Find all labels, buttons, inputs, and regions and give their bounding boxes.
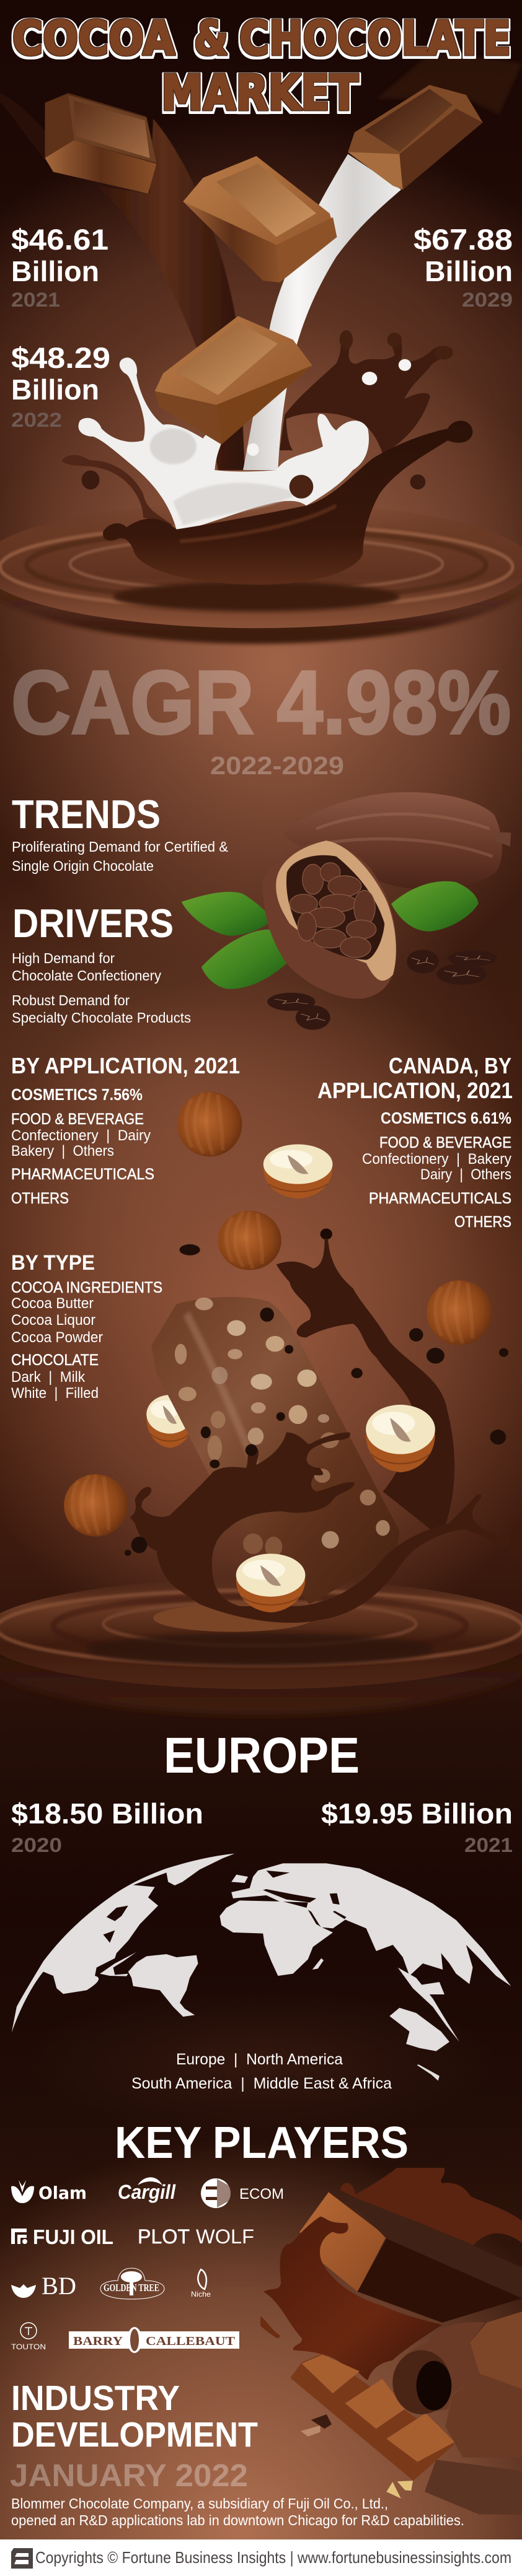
chocolate crown — [61, 330, 473, 585]
chocolate block 3 — [348, 85, 483, 190]
panel: drivers: Chocolate Confectionery — [12, 967, 161, 984]
panel: europe: EUROPE — [164, 1727, 360, 1784]
milk splash — [78, 357, 411, 530]
ribbon of chocolate — [276, 1239, 454, 1531]
logo: barry callebaut: BARRY — [73, 2334, 123, 2348]
region list — [131, 2051, 392, 2092]
logo: olam — [11, 2180, 87, 2203]
panel: canada by application 2021: PHARMACEUTICALS — [369, 1190, 511, 1207]
chocolate block 1 — [45, 93, 157, 194]
title — [12, 11, 511, 121]
panel: industry development: DEVELOPMENT — [11, 2415, 258, 2455]
panel: drivers — [12, 901, 191, 1026]
panel: europe: $18.50 Billion — [11, 1797, 203, 1830]
panel: drivers: Specialty Chocolate Products — [12, 1010, 191, 1026]
panel: by type: Cocoa Powder — [11, 1329, 103, 1346]
panel: industry development: INDUSTRY — [11, 2378, 180, 2418]
logo: bd — [11, 2272, 76, 2300]
chocolate stream — [0, 51, 522, 470]
logo: golden tree: GOLDEN TREE — [104, 2282, 159, 2294]
panel: by type: Cocoa Liquor — [11, 1312, 95, 1329]
chocolate block 2 — [183, 156, 337, 282]
title: & — [194, 11, 228, 66]
new zealand — [417, 2064, 440, 2080]
panel: europe: 2020 — [11, 1834, 62, 1856]
logo: touton — [11, 2323, 46, 2351]
panel: by type: Cocoa Butter — [11, 1295, 94, 1312]
panel: industry development — [10, 2378, 464, 2528]
panel: by application 2021: Bakery | Others — [11, 1143, 114, 1159]
region list: South America | Middle East & Africa — [131, 2075, 392, 2092]
panel: trends — [12, 792, 228, 874]
panel: industry development: opened an R&D applications lab in downtown Chicago for R&D capabilities. — [11, 2512, 464, 2528]
eurasia — [231, 1863, 511, 1986]
whole pod — [283, 792, 511, 889]
panel: by type: CHOCOLATE — [11, 1351, 99, 1369]
ripple pool — [0, 494, 522, 644]
chocolate curl — [392, 2322, 485, 2414]
panel: by type: White | Filled — [11, 1385, 99, 1402]
logo: ecom — [201, 2178, 284, 2208]
halved hazelnut bottom — [236, 1553, 305, 1612]
icon: fortune business insights — [11, 2548, 33, 2569]
whole hazelnut right — [427, 1280, 492, 1345]
stat: 2022 market size: 2022 — [11, 409, 62, 431]
panel: europe: 2021 — [464, 1834, 513, 1856]
halved hazelnut — [263, 1144, 332, 1198]
region list: Europe | North America — [176, 2051, 343, 2068]
southeast asia islands — [398, 1968, 459, 2042]
logo: plot wolf — [138, 2225, 254, 2248]
logo: touton: TOUTON — [11, 2342, 46, 2351]
stat: 2021 market size: 2021 — [11, 289, 60, 311]
logo: cargill: Cargill — [118, 2181, 176, 2203]
title: COCOA — [12, 11, 175, 66]
halved hazelnut right — [366, 1405, 435, 1472]
panel: by application 2021: Confectionery | Dairy — [11, 1127, 151, 1144]
front swirl — [263, 2217, 442, 2380]
illustration: chocolate stack — [260, 2168, 522, 2515]
panel: drivers: High Demand for — [12, 950, 115, 966]
back chocolate splash — [280, 331, 453, 454]
panel: drivers: DRIVERS — [12, 901, 174, 946]
ripple pool — [0, 1569, 522, 1715]
milk stream — [243, 154, 401, 470]
stat: 2021 market size: $46.61 — [11, 223, 108, 256]
logo: niche — [191, 2269, 211, 2299]
back halved hazelnut — [146, 1395, 193, 1448]
logo: bd: BD — [42, 2272, 76, 2300]
panel: by application 2021 — [11, 1053, 240, 1207]
panel: by type — [11, 1251, 162, 1402]
footer — [0, 2539, 522, 2576]
chocolate bar face — [299, 2192, 386, 2292]
floating chocolate drops — [125, 1244, 508, 1556]
africa — [219, 1900, 333, 1976]
panel: industry development: JANUARY 2022 — [10, 2458, 248, 2493]
chocolate bar — [151, 1297, 399, 1604]
stat: 2029 market size: Billion — [425, 255, 513, 287]
hazelnut — [177, 1092, 242, 1156]
logo: golden tree — [100, 2268, 164, 2299]
whole hazelnut left — [64, 1474, 128, 1537]
panel: canada by application 2021 — [317, 1053, 513, 1231]
loose cocoa beans — [267, 950, 497, 1030]
panel: by application 2021: PHARMACEUTICALS — [11, 1166, 154, 1183]
logo: olam: Olam — [38, 2183, 87, 2203]
north america and greenland — [12, 1854, 235, 2033]
panel: drivers: Robust Demand for — [12, 992, 130, 1008]
panel: industry development: Blommer Chocolate Company, a subsidiary of Fuji Oil Co., Ltd., — [11, 2495, 388, 2512]
leaves — [182, 881, 479, 989]
logo: barry callebaut — [69, 2327, 239, 2353]
chocolate tablet — [290, 2354, 454, 2481]
illustration: cocoa pod — [177, 792, 511, 1270]
logo: niche: Niche — [191, 2290, 211, 2299]
stat: 2022 market size: $48.29 — [11, 341, 110, 374]
madagascar — [312, 1958, 324, 1970]
panel: trends: Proliferating Demand for Certified & — [12, 839, 228, 855]
back splash — [340, 2168, 522, 2245]
world map — [12, 1854, 511, 2080]
panel: trends: TRENDS — [12, 792, 161, 837]
front chocolate splash — [130, 1433, 511, 1623]
logo: plot wolf: WOLF — [196, 2225, 254, 2248]
title: MARKET — [161, 66, 358, 121]
stat: 2029 market size: $67.88 — [414, 223, 513, 256]
inland seas — [103, 1871, 346, 1943]
logo: barry callebaut: CALLEBAUT — [146, 2334, 236, 2348]
logo: ecom: ECOM — [239, 2186, 284, 2203]
uk — [231, 1875, 248, 1883]
logo: fuji oil: FUJI OIL — [33, 2225, 113, 2248]
panel: canada by application 2021: Dairy | Others — [420, 1166, 511, 1183]
panel: by type: BY TYPE — [11, 1251, 95, 1275]
panel: by type: Dark | Milk — [11, 1369, 86, 1386]
opened pod — [263, 840, 396, 999]
CAGR callout: 2022-2029 — [210, 751, 344, 780]
panel: by application 2021: FOOD & BEVERAGE — [11, 1111, 144, 1128]
logo: plot wolf: PLOT — [138, 2225, 190, 2248]
stat: 2022 market size — [11, 341, 110, 431]
panel: hero illustration — [0, 51, 522, 644]
chocolate stack — [425, 2312, 522, 2515]
chocolate bar dark side — [358, 2238, 522, 2323]
chocolate bar ribbed top — [343, 2194, 522, 2299]
panel: by application 2021: COSMETICS 7.56% — [11, 1085, 143, 1104]
panel: key players — [11, 2118, 409, 2353]
south america — [128, 1954, 198, 2017]
panel: by application 2021: OTHERS — [11, 1190, 69, 1207]
central america — [100, 1952, 136, 1976]
heading: KEY PLAYERS — [115, 2118, 409, 2168]
panel: europe: $19.95 Billion — [321, 1797, 513, 1830]
chocolate drop — [321, 1228, 332, 1239]
stat: 2021 market size — [11, 223, 108, 311]
stat: 2029 market size — [414, 223, 513, 311]
panel: canada by application 2021: Confectionery | Bakery — [362, 1151, 511, 1168]
top hazelnut — [218, 1211, 281, 1270]
panel: europe — [11, 1727, 513, 1856]
panel: by type: COCOA INGREDIENTS — [11, 1279, 162, 1296]
panel: by application 2021: BY APPLICATION, 2021 — [11, 1053, 240, 1078]
chocolate block 4 — [155, 316, 312, 445]
nut bits — [260, 2316, 413, 2499]
panel: trends: Single Origin Chocolate — [12, 858, 154, 874]
stat: 2021 market size: Billion — [11, 255, 99, 287]
panel: canada by application 2021: OTHERS — [454, 1213, 511, 1231]
australia — [389, 2008, 449, 2051]
stat: 2022 market size: Billion — [11, 373, 99, 406]
stat: 2029 market size: 2029 — [462, 289, 513, 311]
illustration: chocolate bar splash — [0, 1239, 522, 1715]
